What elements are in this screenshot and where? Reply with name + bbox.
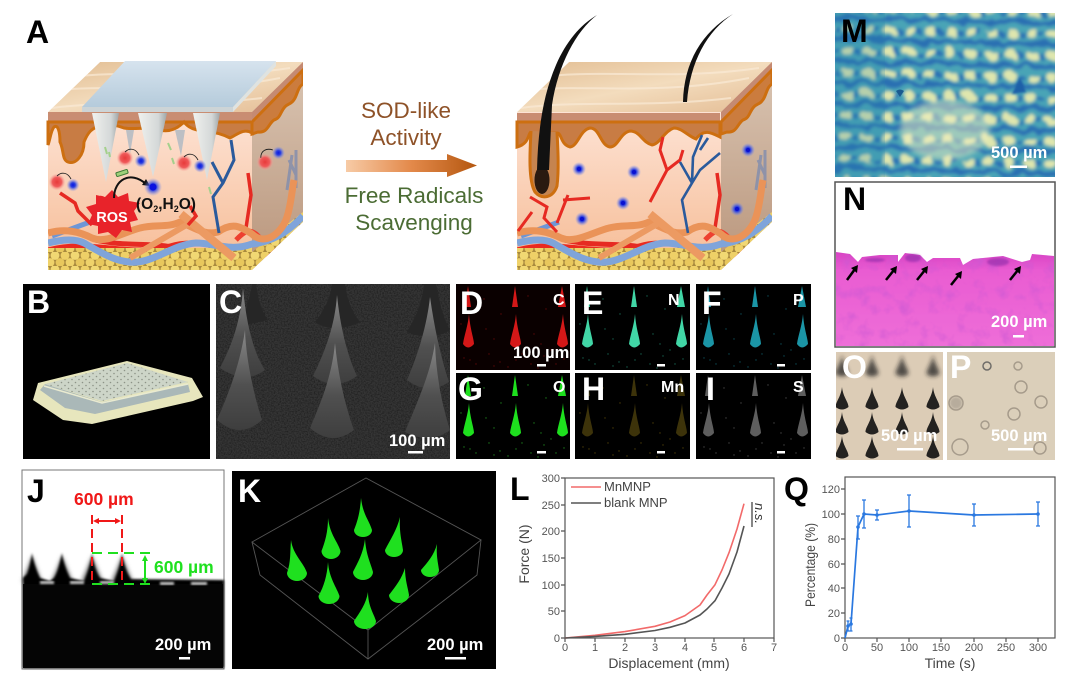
panel N: histology (835, 181, 1055, 347)
x tick labels: 150 (932, 642, 950, 654)
red spacing annotation (74, 489, 134, 583)
y tick labels: 20 (828, 608, 840, 620)
products label: (O (136, 196, 153, 213)
x tick labels: 0 (842, 642, 848, 654)
hair follicle (530, 131, 558, 197)
panel letter P: P (950, 349, 971, 385)
panel G: oxygen map: G (458, 371, 483, 407)
x tick labels: 0 (562, 642, 568, 654)
superoxide dot (144, 178, 162, 196)
panel C: SEM image (216, 284, 450, 459)
short hair (683, 14, 733, 102)
panel M: stained skin (835, 13, 1055, 177)
ROS burst (86, 190, 140, 238)
legend (571, 479, 668, 510)
blue vessel tree (680, 135, 720, 233)
panel D: carbon map: C (553, 292, 565, 309)
panel G: oxygen map (456, 371, 570, 459)
back row needles (240, 284, 450, 336)
caption: free radicals scavenging: Free Radicals (345, 183, 483, 208)
y tick labels: 60 (828, 559, 840, 571)
panel G: oxygen map: O (553, 379, 565, 396)
panel O: needles before (836, 349, 943, 460)
green height annotation: 600 µm (154, 557, 214, 577)
panel I: sulfur map: I (706, 371, 715, 407)
caption: free radicals scavenging: Scavenging (355, 210, 473, 235)
green rods (105, 143, 211, 194)
right skin cube after treatment (517, 14, 772, 270)
y tick labels: 300 (542, 473, 560, 485)
dissolving back needles (126, 130, 134, 154)
panel H: manganese map: H (582, 371, 605, 407)
y tick labels: 0 (554, 633, 560, 645)
caption: SOD-like activity: Activity (370, 125, 442, 150)
panel I: sulfur map (696, 371, 811, 459)
needle silhouette (23, 553, 224, 668)
y tick labels: 200 (542, 526, 560, 538)
panel P: needles after (947, 349, 1055, 460)
panel Q: percentage over time chart: Percentage (%) (802, 523, 818, 607)
needle array surface (45, 363, 188, 401)
x tick labels: 250 (997, 642, 1015, 654)
panel H: manganese map (575, 371, 690, 459)
panel letter A: A (26, 14, 49, 50)
scale: 100 um: 100 µm (389, 432, 445, 450)
radical pairs (48, 173, 80, 192)
green height annotation (92, 553, 214, 584)
panel F: phosphorus map: P (793, 292, 804, 309)
curve: MnMNP (565, 504, 744, 638)
scale: 100 um: 100 µm (513, 344, 569, 362)
y tick labels: 250 (542, 500, 560, 512)
x tick labels: 7 (771, 642, 777, 654)
caption: SOD-like activity (361, 98, 451, 150)
panel L: force-displacement chart (510, 471, 777, 671)
panel letter M: M (841, 13, 868, 49)
plot frame and ticks (561, 478, 774, 642)
x tick labels: 3 (652, 642, 658, 654)
data line with error bars (845, 495, 1040, 638)
x tick labels: 50 (871, 642, 883, 654)
scale: 200 um: 200 µm (155, 636, 211, 654)
panel letter L: L (510, 471, 530, 507)
y tick labels: 80 (828, 534, 840, 546)
x tick labels: 6 (741, 642, 747, 654)
x tick labels: 4 (682, 642, 688, 654)
x tick labels: 5 (711, 642, 717, 654)
tissue section (836, 252, 1054, 346)
y tick labels (542, 473, 560, 645)
scale: 500 um: 500 µm (991, 427, 1047, 445)
x tick labels: 1 (592, 642, 598, 654)
scale: 200 um: 200 µm (427, 636, 483, 654)
y tick labels: 40 (828, 583, 840, 595)
scale: 500 um (992, 146, 1046, 168)
panel J: side view with dimensions (22, 470, 224, 669)
panel E: nitrogen map (575, 284, 690, 370)
y tick labels: 100 (822, 509, 840, 521)
panel D: carbon map: D (460, 285, 483, 321)
x tick labels (842, 642, 1047, 654)
highlights at needle bases (40, 581, 207, 585)
y tick labels: 100 (542, 580, 560, 592)
blue vessel (212, 140, 234, 233)
scale: 500 um: 500 µm (991, 144, 1047, 162)
caption: SOD-like activity: SOD-like (361, 98, 451, 123)
x tick labels: 100 (900, 642, 918, 654)
products label: O) (179, 196, 196, 213)
panel F: phosphorus map: F (702, 285, 722, 321)
panel A: schematic (26, 14, 772, 270)
significance marker: n.s. (752, 503, 767, 524)
x tick labels: 2 (622, 642, 628, 654)
red vessels (518, 137, 683, 232)
middle row needles (220, 288, 449, 389)
curved reaction arrow (114, 177, 146, 198)
red vessels (60, 193, 196, 225)
panel letter N: N (843, 181, 866, 217)
panel B: patch photograph (23, 284, 210, 459)
panel letter K: K (238, 473, 261, 509)
plot frame and ticks (841, 477, 1055, 642)
wireframe box (252, 478, 481, 659)
panel Q: percentage over time chart (784, 471, 1055, 671)
curve: blank MNP (565, 526, 744, 638)
panel D: carbon map (456, 284, 570, 370)
needle rows (836, 354, 940, 376)
blurred needle halos (22, 556, 133, 582)
y tick labels: 120 (822, 484, 840, 496)
legend: blank MNP (604, 495, 668, 510)
microneedle tips (92, 113, 220, 182)
panel L: force-displacement chart: Force (N) (516, 524, 532, 584)
arrow (346, 154, 477, 177)
y tick labels (822, 484, 840, 645)
panel E: nitrogen map: N (668, 292, 680, 309)
panel letter J: J (27, 473, 45, 509)
caption: free radicals scavenging (345, 183, 483, 235)
red spacing annotation: 600 µm (74, 489, 134, 509)
device base and rim (33, 361, 203, 424)
ROS burst: ROS (96, 210, 128, 226)
scale: 200 um: 200 µm (991, 313, 1047, 331)
products label: ,H (158, 196, 174, 213)
long hair (537, 15, 597, 170)
panel letter O: O (842, 349, 867, 385)
panel letter Q: Q (784, 471, 809, 507)
fluorescent needles (287, 498, 439, 629)
left skin cube with microneedle patch (48, 61, 303, 270)
panel F: phosphorus map (696, 284, 811, 370)
dissolved needle rings (949, 362, 1047, 455)
panel H: manganese map: Mn (661, 379, 684, 396)
panel letter C: C (219, 284, 242, 320)
scale: 500 um: 500 µm (881, 427, 937, 445)
y tick labels: 0 (834, 633, 840, 645)
staining marks (865, 254, 1009, 266)
x tick labels: 300 (1029, 642, 1047, 654)
y tick labels: 150 (542, 553, 560, 565)
axis titles: Displacement (mm) (608, 655, 730, 671)
products label: 2 (174, 204, 179, 214)
axis titles: Time (s) (925, 655, 975, 671)
front row needles (217, 330, 450, 438)
epidermis wave (517, 122, 720, 147)
panel K: confocal 3D view (232, 471, 496, 669)
panel letter B: B (27, 284, 50, 320)
arrows (847, 269, 1018, 285)
x tick labels (562, 642, 777, 654)
legend: MnMNP (604, 479, 651, 494)
panel E: nitrogen map: E (582, 285, 603, 321)
products label: 2 (153, 204, 158, 214)
y tick labels: 50 (548, 606, 560, 618)
process arrow with captions (345, 98, 483, 235)
epidermis wave (48, 122, 252, 163)
x tick labels: 200 (965, 642, 983, 654)
panel I: sulfur map: S (793, 379, 804, 396)
scavenged radicals (572, 162, 586, 176)
patch backing (82, 61, 276, 112)
